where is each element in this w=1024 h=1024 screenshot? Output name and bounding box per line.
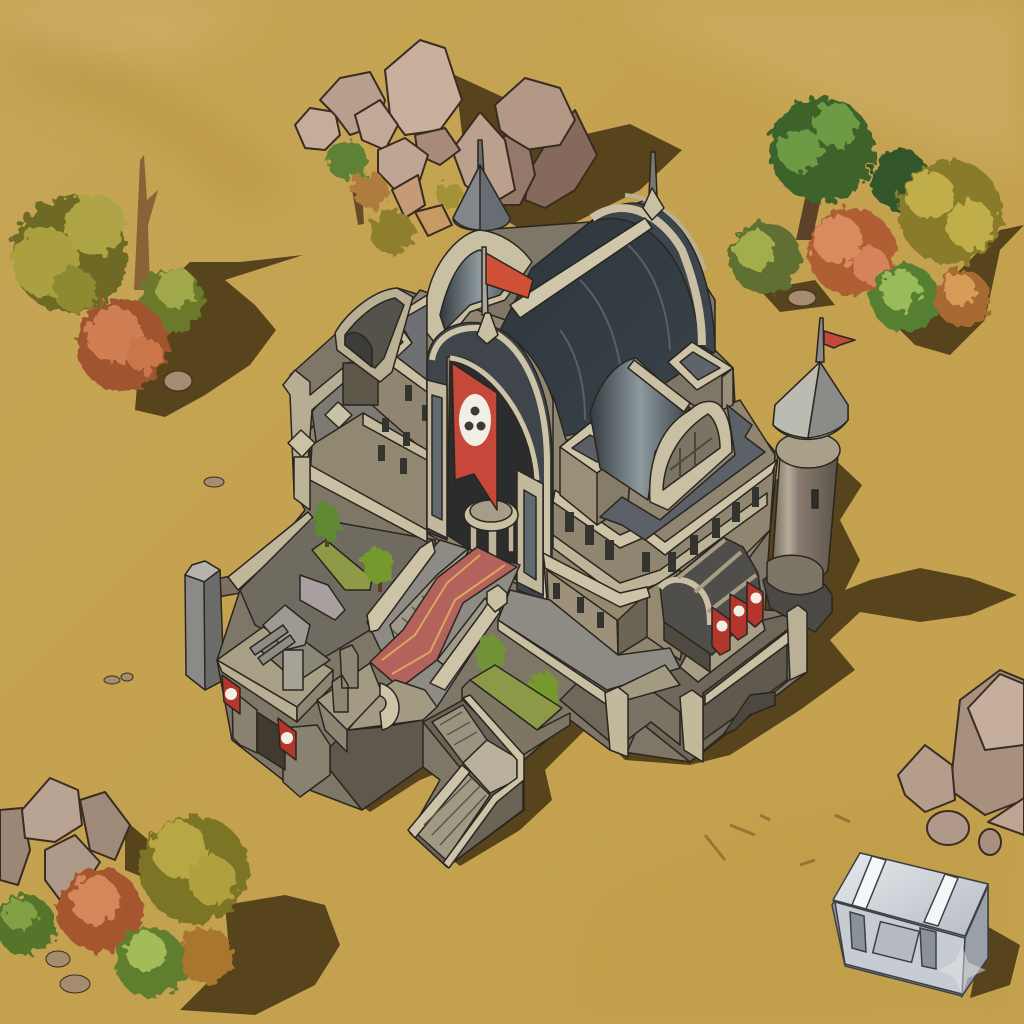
- grand stairs: left: [367, 540, 470, 650]
- main red banner: [452, 363, 497, 510]
- paved court around carpet: [367, 540, 520, 707]
- rocks: right edge: [898, 670, 1024, 855]
- main building mass: [310, 290, 775, 660]
- left rooftop zigzag: [383, 295, 427, 392]
- dome: left wing: [335, 288, 413, 405]
- rocks: bottom left: [0, 778, 130, 900]
- dome: right wing: [590, 358, 732, 510]
- small barrel dome with triple banners: [660, 537, 765, 682]
- trees: upper right group: [729, 98, 1002, 332]
- back spire: [453, 140, 510, 231]
- right wing walls and trim: [553, 342, 777, 610]
- supply chest: [832, 853, 988, 996]
- right rooftop floor: [600, 405, 765, 540]
- trees: left group: [11, 155, 204, 391]
- gate pillar and bridge: [185, 561, 257, 690]
- plants beside top rocks: [327, 140, 463, 254]
- anti-air gun: [250, 605, 358, 712]
- lower right terrace and parapets: [498, 590, 807, 762]
- rocks: top cluster: [295, 40, 597, 236]
- right foundation walls: [560, 610, 807, 762]
- gun platform: [217, 627, 437, 810]
- rear glazed arch: [427, 230, 532, 350]
- pavilion under arch: [464, 499, 518, 570]
- garden shrubs: [312, 504, 559, 718]
- lower right garden: [462, 665, 570, 755]
- left terrace: [283, 362, 427, 542]
- scattered small stones: [46, 290, 816, 993]
- ground cracks: [705, 815, 850, 865]
- fortress: [185, 140, 855, 868]
- main front arch: [427, 323, 552, 603]
- grand stairs: right: [430, 585, 507, 690]
- right wing windows: [565, 487, 759, 572]
- flag on main arch: [477, 247, 533, 344]
- right watchtower: [763, 318, 855, 632]
- red carpet: [370, 547, 517, 688]
- outer garden wall: [228, 512, 440, 660]
- main barrel roof: [500, 152, 715, 437]
- lower right wing wall: [543, 553, 690, 660]
- sparkle mark: [938, 945, 986, 995]
- lower staircase: [408, 695, 524, 868]
- wing windows: [378, 385, 428, 474]
- building silhouette base: [217, 198, 807, 867]
- trees: bottom left group: [0, 816, 249, 997]
